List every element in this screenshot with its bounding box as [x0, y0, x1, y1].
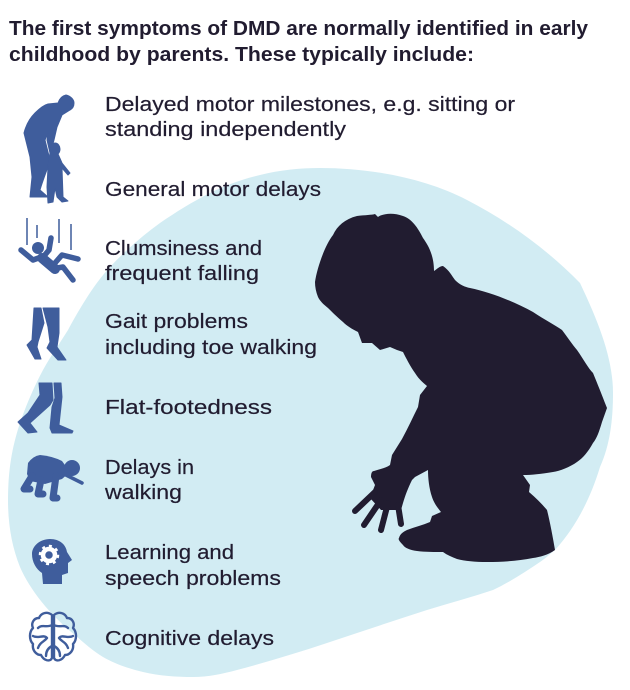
text: gait problems: Gait problems: [105, 310, 248, 333]
child silhouette: [315, 214, 607, 562]
text: general motor delays: General motor delays: [105, 178, 321, 201]
text: delays in walking: [104, 456, 194, 504]
icon: crawling toddler: [24, 455, 82, 498]
icon: head with gear: [32, 539, 72, 584]
text: delayed motor milestones: [105, 93, 515, 141]
icon: parent and child: [24, 95, 74, 203]
text: delays in walking: Delays in: [105, 456, 194, 479]
text: delayed motor milestones: standing independently: [105, 118, 347, 141]
text: learning and speech: [105, 541, 281, 590]
text: flat-footedness: Flat-footedness: [105, 396, 272, 419]
icon: falling figure: [21, 218, 78, 280]
text: clumsiness: frequent falling: [105, 262, 259, 285]
text: delays in walking: walking: [104, 481, 182, 504]
icon: brain: [30, 613, 76, 660]
title: childhood by parents. These typically include:: [9, 43, 474, 66]
text: clumsiness: Clumsiness and: [105, 237, 262, 260]
title: The first symptoms of DMD are normally identified in early: [9, 17, 589, 40]
text: gait problems: [105, 310, 317, 359]
icon: toe walking legs: [27, 308, 66, 360]
background blob: [8, 168, 613, 677]
title: [9, 17, 589, 66]
text: gait problems: including toe walking: [105, 336, 317, 359]
text: learning and speech: Learning and: [105, 541, 234, 564]
text: clumsiness: [105, 237, 262, 285]
text: cognitive delays: Cognitive delays: [105, 627, 274, 650]
text: learning and speech: speech problems: [105, 567, 281, 590]
icon: flat feet legs: [18, 383, 73, 433]
text: delayed motor milestones: Delayed motor milestones, e.g. sitting or: [105, 93, 515, 116]
